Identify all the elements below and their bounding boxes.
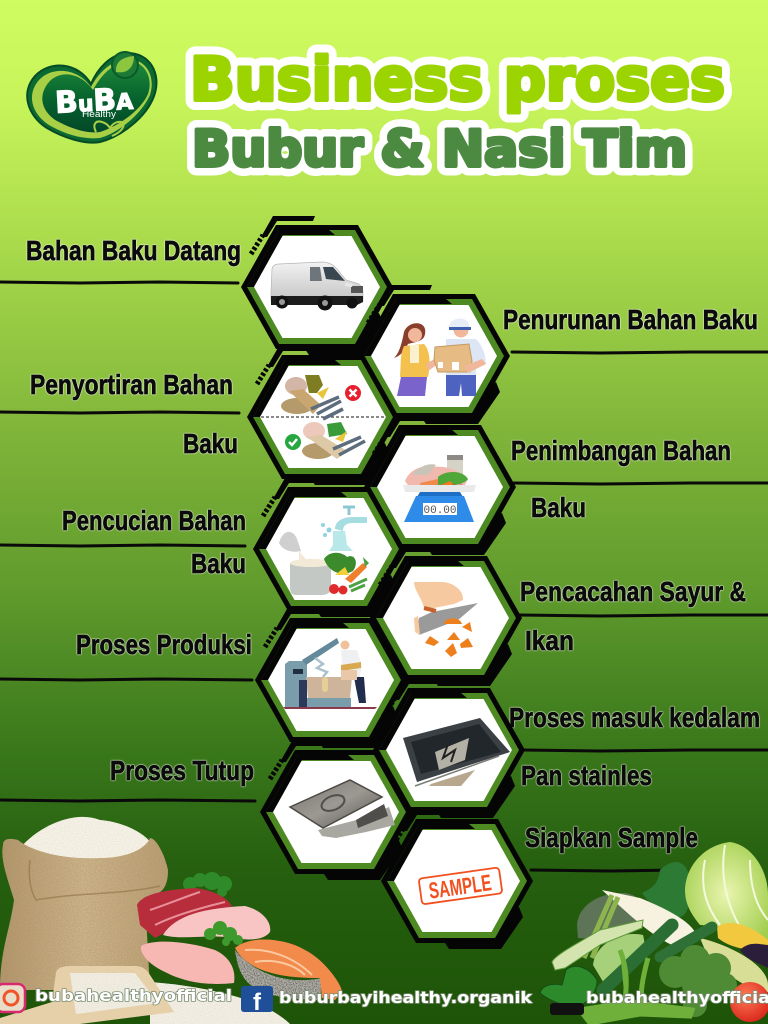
logo: BuBA Healthy heart: Healthy (82, 109, 117, 119)
step 3: Penyortiran Bahan Baku (0, 369, 239, 459)
illustration: squash (700, 938, 768, 992)
icon: accepted ingredients (285, 422, 365, 459)
subtitle: Bubur & Nasi Tim: Bubur & Nasi Tim (192, 120, 687, 178)
illustration: vegetables pile (540, 842, 768, 1023)
hexagon 8: stainless pan (373, 679, 525, 818)
hexagon 10: sample stamp (381, 810, 533, 949)
step 3: Penyortiran Bahan Baku: Penyortiran Bahan (30, 369, 233, 400)
hexagon 4: weighing scale (364, 416, 516, 555)
illustration: beef slices (137, 888, 232, 938)
footer: facebook icon (241, 986, 273, 1016)
icon: courier with box (434, 318, 486, 396)
illustration: broccoli (659, 945, 737, 1017)
illustration: eggplant (740, 944, 768, 968)
icon: blue scale with display: 00.00 (423, 505, 457, 517)
step 9: Proses Tutup: Proses Tutup (110, 755, 254, 786)
illustration: green beans (580, 950, 692, 1023)
logo: BuBA Healthy heart (27, 52, 156, 143)
step 4: Penimbangan Bahan Baku: Baku (531, 492, 586, 523)
illustration: parsley garnish (204, 921, 243, 946)
illustration: cucumber long (603, 925, 672, 990)
footer: instagram handle: bubahealthyofficial (35, 986, 232, 1005)
step 8: Proses masuk kedalam Pan stainles: Pan stainles (521, 760, 652, 791)
illustration: back broccoli (577, 893, 642, 938)
icon: SAMPLE stamp: SAMPLE (427, 869, 493, 904)
icon: worker in white coat (340, 640, 366, 703)
illustration: cucumber short (660, 927, 712, 957)
footer: facebook icon: f (253, 989, 262, 1016)
icon: hand holding knife (414, 582, 478, 635)
step 5: Pencucian Bahan Baku: Baku (191, 548, 246, 579)
icon: blue scale with display (403, 485, 476, 522)
divider dashed line (261, 416, 385, 418)
step 1: Bahan Baku Datang: Bahan Baku Datang (26, 235, 241, 266)
icon: mixer machine (283, 638, 377, 709)
hexagon 7: production machine (255, 609, 407, 748)
illustration: asparagus (584, 895, 618, 958)
illustration: chicken breast lower (141, 942, 234, 984)
hexagon 5: washing ingredients (253, 478, 405, 617)
title: Business proses: Business proses (190, 45, 725, 115)
icon: lid (290, 780, 382, 828)
step 6: Pencacahan Sayur & Ikan: Ikan (525, 625, 574, 656)
hexagon 1: delivery van (241, 216, 393, 355)
step 8: Proses masuk kedalam Pan stainles (509, 702, 768, 791)
icon: vegetables (324, 553, 369, 594)
logo leaf badge (112, 52, 138, 78)
footer: facebook handle: buburbayihealthy.organik (279, 988, 532, 1007)
footer: instagram icon (0, 984, 25, 1012)
step 3: Penyortiran Bahan Baku: Baku (183, 428, 238, 459)
hexagon 6: chopping carrots (370, 547, 522, 686)
illustration: tomato (730, 982, 768, 1022)
illustration: napa cabbage (685, 842, 768, 945)
icon: water tap (321, 507, 367, 551)
step 7: Proses Produksi: Proses Produksi (76, 629, 252, 660)
illustration: chicken breast top (163, 906, 270, 939)
icon: white van (271, 262, 363, 310)
illustration: salmon steak (235, 940, 342, 1000)
illustration: light cabbage (593, 934, 644, 985)
illustration: green onion (552, 920, 643, 970)
icon: SAMPLE stamp (419, 867, 502, 905)
subtitle overlay stroke: Bubur & Nasi Tim: Bubur & Nasi Tim (192, 120, 687, 178)
icon: dark stainless pan (403, 718, 510, 786)
illustration: rice sack (0, 817, 168, 990)
illustration: dark leaves (642, 862, 690, 917)
title overlay stroke: Business proses: Business proses (190, 45, 725, 115)
hexagon 3: sorting ingredients (247, 346, 399, 485)
illustration: corn (717, 923, 768, 950)
footer: second instagram icon partly hidden (550, 1003, 584, 1015)
hexagon 2: woman receiving box from courier (358, 285, 510, 424)
illustration: daikon (602, 890, 695, 945)
step 10: Siapkan Sample: Siapkan Sample (525, 822, 698, 853)
step 5: Pencucian Bahan Baku (0, 505, 246, 579)
icon: pan base (318, 804, 395, 838)
illustration: green peppers (540, 966, 597, 1008)
footer: second instagram handle: bubahealthyofficial (586, 988, 768, 1007)
illustration: rice spill and wooden scoop (0, 966, 290, 1024)
illustration: parsley (183, 872, 232, 897)
icon: rejected ingredients (281, 375, 361, 419)
icon: jar and food (405, 455, 468, 492)
icon: bowl pouring rice into pot (279, 532, 332, 595)
icon: woman (394, 323, 438, 396)
step 6: Pencacahan Sayur & Ikan (519, 576, 768, 656)
hexagon 9: stainless pan with lid (260, 741, 412, 880)
step 4: Penimbangan Bahan Baku (511, 435, 768, 523)
step 5: Pencucian Bahan Baku: Pencucian Bahan (62, 505, 246, 536)
icon: carrot slices (425, 618, 473, 657)
logo: BuBA Healthy heart: BuBA (54, 82, 134, 121)
